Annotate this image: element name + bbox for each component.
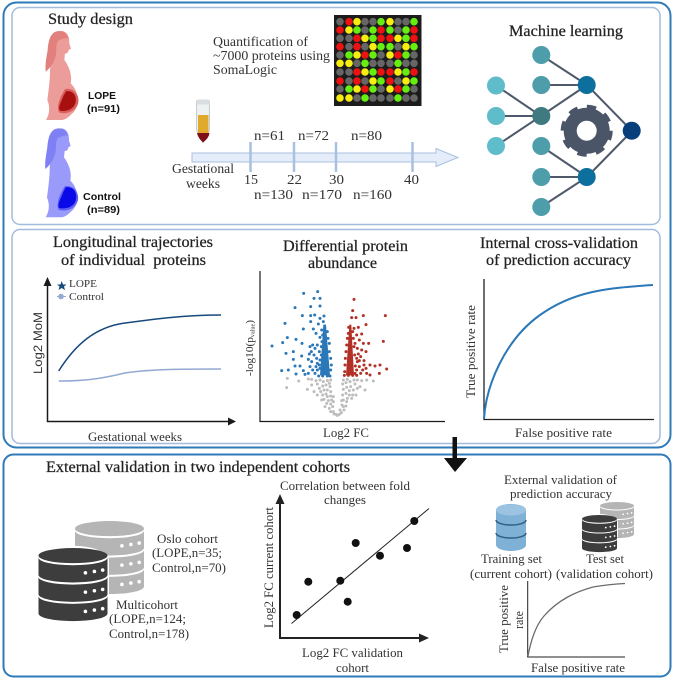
line chart: trajectories: Log2 MoM — [31, 312, 45, 374]
icon: protein microarray — [334, 15, 422, 106]
arrow: down to validation — [444, 437, 467, 472]
text: quantification: Quantification of — [213, 35, 308, 50]
label: control n — [83, 192, 121, 216]
ROC curve: external: False positive rate — [531, 661, 625, 675]
scatter plot: fold change correlation: Correlation between fold — [280, 479, 411, 493]
label: control n: Control — [83, 192, 121, 203]
timeline labels: n=72 — [298, 129, 329, 144]
scatter plot: fold change correlation: Log2 FC validation — [302, 646, 404, 660]
label: LOPE n: LOPE — [88, 91, 116, 102]
line chart: trajectories: Gestational weeks — [88, 430, 182, 444]
icon: test set databases — [580, 502, 634, 552]
label: Multicohort: Control,n=178) — [109, 627, 189, 641]
label: training set: (current cohort) — [470, 567, 552, 581]
icon: LOPE pregnant woman — [46, 31, 78, 120]
timeline labels: 15 — [244, 173, 258, 188]
heading: differential protein abundance — [283, 238, 408, 272]
icon: gear — [564, 108, 610, 154]
ROC curve: True positive rate — [464, 305, 478, 398]
text: quantification: SomaLogic — [213, 63, 277, 78]
volcano plot: ) — [244, 320, 256, 324]
text: quantification: ~7000 proteins using — [213, 49, 330, 64]
icon: Oslo database — [75, 521, 144, 594]
label: test set — [556, 552, 653, 581]
panel: study design and machine learning — [12, 8, 660, 224]
timeline labels: n=160 — [353, 188, 392, 203]
line chart: trajectories — [31, 277, 236, 444]
scatter plot: fold change correlation: Log2 FC current cohort — [262, 506, 276, 628]
legend — [57, 278, 104, 303]
volcano plot: value — [250, 323, 256, 337]
heading: external validation of prediction accuracy — [504, 473, 618, 501]
volcano plot: Log2 FC — [323, 426, 369, 440]
icon: training set database — [496, 504, 526, 551]
label: Oslo cohort: Oslo cohort — [157, 532, 219, 546]
volcano plot: -log10(p — [244, 338, 256, 376]
label: test set: Test set — [586, 552, 625, 566]
ROC curve: external: rate — [512, 611, 526, 629]
panel: external validation — [4, 454, 670, 676]
heading: longitudinal: Longitudinal trajectories — [53, 234, 213, 251]
label: control n: (n=89) — [87, 205, 120, 216]
timeline labels — [172, 129, 419, 203]
label: training set — [470, 552, 552, 581]
timeline labels: n=80 — [351, 129, 382, 144]
timeline labels: n=61 — [254, 129, 285, 144]
scatter plot: fold change correlation — [262, 479, 429, 675]
heading: differential protein abundance: abundance — [308, 255, 377, 272]
ROC curve: external — [497, 581, 625, 675]
scatter plot: fold change correlation: changes — [324, 493, 366, 507]
icon: Multicohort database — [36, 546, 109, 621]
heading: internal cross-validation — [480, 235, 638, 269]
arrow: timeline — [192, 148, 458, 166]
volcano plot — [244, 271, 445, 440]
label: Multicohort: (LOPE,n=124; — [109, 612, 186, 626]
legend: Control — [69, 291, 104, 303]
heading: external validation of prediction accuracy: prediction accuracy — [510, 487, 613, 501]
timeline labels: 22 — [287, 173, 302, 188]
panel: top outer frame — [4, 2, 670, 448]
heading: longitudinal: of individual proteins — [61, 252, 206, 269]
heading: internal cross-validation: of prediction accuracy — [486, 252, 631, 269]
heading: external validation of prediction accuracy: External validation of — [504, 473, 618, 487]
legend: LOPE — [69, 278, 97, 290]
label: test set: (validation cohort) — [556, 567, 653, 581]
heading: longitudinal — [53, 234, 213, 269]
heading: machine learning: Machine learning — [509, 23, 623, 40]
scatter plot: fold change correlation: cohort — [336, 661, 370, 675]
ROC curve: False positive rate — [515, 426, 612, 440]
icon: control pregnant woman — [45, 128, 78, 217]
timeline labels: n=130 — [254, 188, 293, 203]
label: Multicohort — [109, 598, 189, 641]
timeline labels: 30 — [329, 173, 344, 188]
ROC curve: external: True positive — [497, 585, 511, 653]
heading: differential protein abundance: Differential protein — [283, 238, 408, 255]
heading: internal cross-validation: Internal cross-validation — [480, 235, 638, 252]
label: Multicohort: Multicohort — [116, 598, 179, 612]
label: Oslo cohort: (LOPE,n=35; — [152, 546, 222, 560]
icon: neural network — [487, 46, 641, 216]
timeline labels: n=170 — [302, 188, 342, 203]
heading: study design: Study design — [48, 11, 133, 28]
panel: analysis charts — [12, 230, 660, 444]
text: quantification — [213, 35, 330, 78]
label: LOPE n — [87, 91, 120, 115]
timeline labels: 40 — [404, 173, 419, 188]
heading: external validation: External validation in two independent cohorts — [46, 459, 350, 476]
timeline labels: Gestational — [172, 162, 234, 177]
timeline labels: weeks — [186, 177, 220, 192]
label: Oslo cohort: Control,n=70) — [152, 561, 226, 575]
label: Oslo cohort — [152, 532, 226, 575]
ROC curve — [464, 279, 654, 440]
timeline ticks — [250, 142, 412, 172]
label: LOPE n: (n=91) — [87, 104, 120, 115]
label: training set: Training set — [481, 552, 543, 566]
icon: blood tube — [196, 100, 210, 142]
